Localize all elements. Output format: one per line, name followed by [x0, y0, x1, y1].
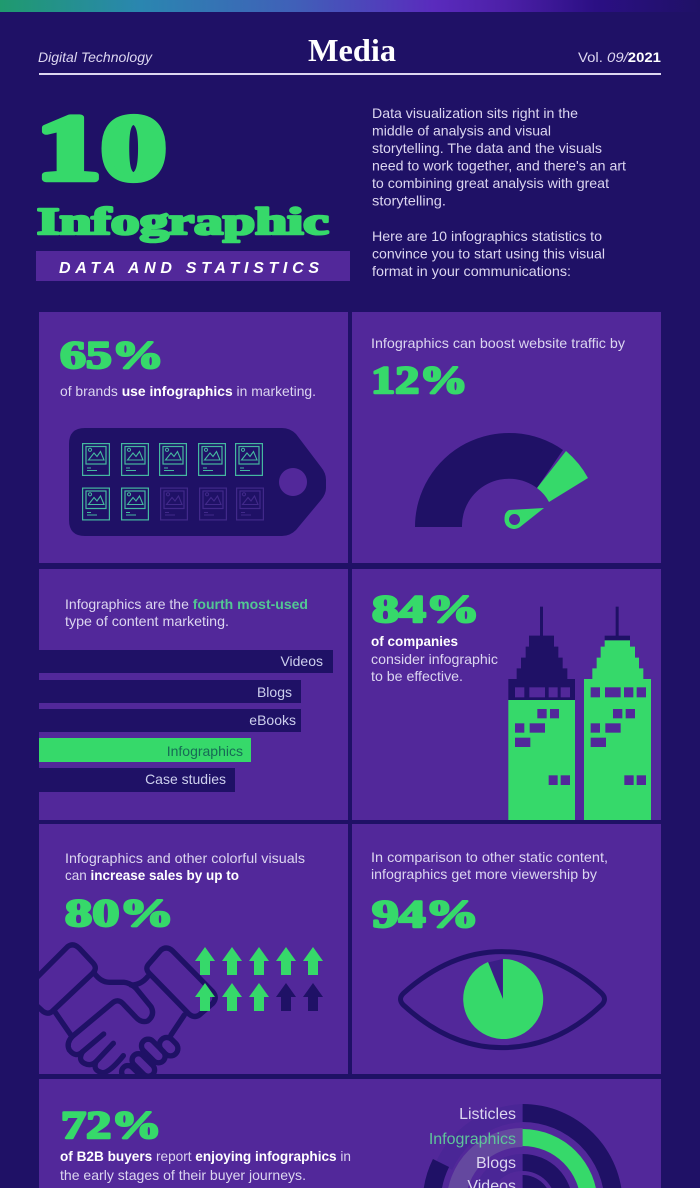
intro text: storytelling. The data and the visuals — [372, 140, 602, 156]
title word: Infographic — [37, 199, 329, 243]
caption: In comparison to other static content, — [371, 849, 608, 865]
intro text: storytelling. — [372, 192, 446, 208]
title — [36, 97, 350, 281]
panel: 12% traffic — [352, 312, 661, 563]
icon: eye — [400, 952, 604, 1048]
intro text: Data visualization sits right in the — [372, 105, 578, 121]
intro text: Here are 10 infographics statistics to — [372, 228, 602, 244]
bar chart: Videos — [280, 653, 323, 669]
panel: 84% companies: consider infographic — [371, 651, 498, 667]
pie chart 94% — [463, 959, 543, 1039]
track: videos — [523, 1175, 552, 1188]
stat 84%: 84% — [372, 588, 480, 631]
panel: 80% sales: can increase sales by up to — [65, 867, 239, 883]
radial bar chart: Infographics — [429, 1131, 516, 1148]
bar chart: Blogs — [257, 684, 292, 700]
icon: skyscrapers — [508, 607, 651, 820]
panel: 94% viewership — [352, 824, 661, 1074]
stat 94%: 94% — [372, 893, 479, 936]
header — [38, 32, 661, 75]
caption: Infographics can boost website traffic by — [371, 335, 625, 351]
caption: of companies — [371, 633, 458, 649]
icon: handshake — [36, 945, 215, 1087]
intro text: format in your communications: — [372, 263, 571, 279]
intro text: need to work together, and there's an art — [372, 158, 626, 174]
bar chart — [39, 650, 333, 792]
track: listicles — [444, 1113, 523, 1166]
intro text: middle of analysis and visual — [372, 122, 551, 138]
radial bar chart — [429, 1104, 623, 1188]
subtitle banner — [36, 251, 350, 281]
panel: 72% buyers: the early stages of their buyer journeys. — [60, 1167, 306, 1183]
panel: 94% viewership: infographics get more viewership by — [371, 866, 597, 882]
caption: Infographics and other colorful visuals — [65, 850, 305, 866]
stat 12%: 12% — [371, 358, 468, 402]
icon: arrows — [195, 947, 323, 1011]
panel: fourth most-used: type of content marketing. — [65, 613, 229, 629]
bar chart: Case studies — [145, 771, 226, 787]
track: blogs — [481, 1162, 523, 1188]
masthead: Media — [308, 32, 396, 68]
big number: 10 — [36, 97, 166, 200]
panel: fourth most-used — [39, 569, 348, 820]
top gradient bar — [0, 0, 700, 12]
icon: price tag — [69, 428, 326, 536]
stat 80%: 80% — [65, 892, 174, 935]
bar chart: eBooks — [249, 712, 296, 728]
volume: Vol. 09/2021 — [578, 49, 661, 65]
intro text: to combining great analysis with great — [372, 175, 609, 191]
stat 65%: 65% — [60, 333, 164, 376]
intro text — [372, 105, 626, 279]
panel: 65% brands — [39, 312, 348, 563]
subtitle banner: DATA AND STATISTICS — [59, 260, 319, 277]
panel: 84% companies — [352, 569, 661, 820]
chart labels: Listicles — [459, 1106, 516, 1123]
intro text: convince you to start using this visual — [372, 246, 605, 262]
panel: 80% sales — [36, 824, 348, 1087]
panel: 84% companies: to be effective. — [371, 668, 463, 684]
bar chart: Infographics — [167, 743, 243, 759]
caption: of B2B buyers report enjoying infographics in — [60, 1148, 351, 1164]
track: infographics — [456, 1137, 523, 1188]
radial bar chart: Blogs — [476, 1155, 516, 1172]
section label: Digital Technology — [38, 49, 153, 65]
panel: 72% buyers — [39, 1079, 661, 1188]
stat 72%: 72% — [61, 1103, 162, 1147]
caption: of brands use infographics in marketing. — [60, 383, 316, 399]
caption: Infographics are the fourth most-used — [65, 596, 308, 612]
gauge chart — [415, 433, 588, 529]
icons: image grid — [83, 444, 263, 520]
